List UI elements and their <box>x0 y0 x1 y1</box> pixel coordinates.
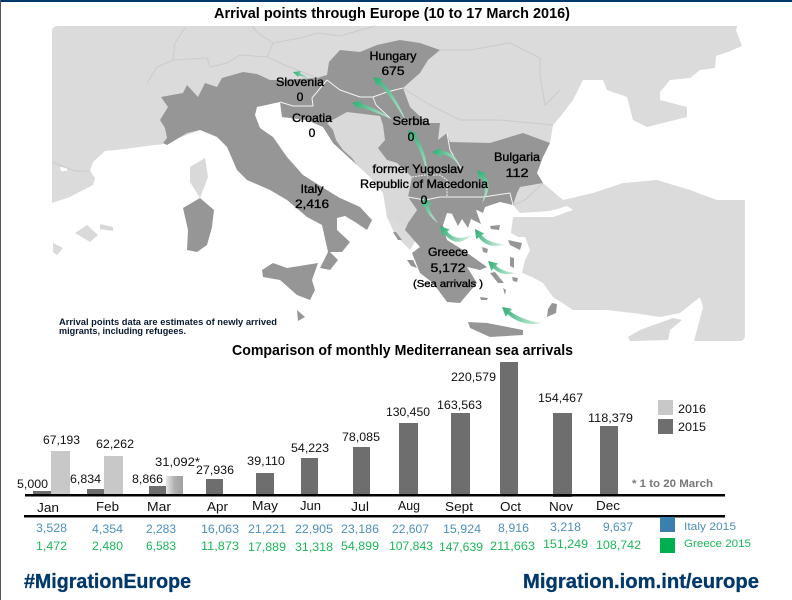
bar chart: monthly arrivals <box>17 362 725 518</box>
legend: 2016 and 2015: 2015 <box>678 420 706 434</box>
bar values: 27,936 <box>196 463 234 477</box>
land: Corsica <box>190 158 208 198</box>
data row: Greece 2015: 211,663 <box>490 541 535 553</box>
land: Balearic islands <box>53 224 113 255</box>
land: Sicily <box>262 263 318 300</box>
land: Bosnia, Montenegro and Albania <box>327 112 417 227</box>
data row: Greece 2015: 151,249 <box>543 539 588 551</box>
label: Bulgaria: Bulgaria <box>494 150 540 164</box>
data row: Italy 2015: 22,607 <box>392 524 429 536</box>
bar: April <box>206 479 223 495</box>
bar values <box>17 370 633 491</box>
title: arrival points: Arrival points through Europe (10 to 17 March 2016) <box>214 5 570 22</box>
legend: Greece 2015: Greece 2015 <box>684 538 751 550</box>
month labels: Feb <box>96 499 119 514</box>
legend: Italy 2015 <box>660 517 736 533</box>
bar values: 5,000 <box>17 477 48 491</box>
data row: Italy 2015: 16,063 <box>201 524 239 536</box>
data row: Italy 2015: 8,916 <box>498 523 529 535</box>
bar: October <box>500 362 518 495</box>
label: Hungary <box>370 49 416 78</box>
bar: June <box>301 458 318 495</box>
label: Slovenia: Slovenia <box>276 75 324 89</box>
bars: February <box>87 456 123 495</box>
bar values: 67,193 <box>43 433 80 447</box>
label: former Yugoslav Republic of Macedonia <box>360 162 488 207</box>
data row: Greece 2015: 107,843 <box>389 541 433 553</box>
land: Malta <box>297 310 305 321</box>
bar: May <box>256 473 274 496</box>
bar values: 118,379 <box>588 411 633 425</box>
data row: Italy 2015: 3,218 <box>550 522 581 534</box>
data row: Greece 2015: 31,318 <box>295 542 333 554</box>
data row: Italy 2015: 23,186 <box>341 524 379 536</box>
data row: Greece 2015: 17,889 <box>248 542 286 554</box>
bar values: 78,085 <box>342 430 380 444</box>
label: Serbia <box>392 114 430 144</box>
legend: 2016 and 2015: 2016 <box>678 402 706 416</box>
data row: Italy 2015: 9,637 <box>603 522 633 534</box>
month labels: Oct <box>500 499 521 514</box>
month labels: Jan <box>37 500 59 515</box>
arrow: to Serbia <box>408 130 428 180</box>
bar values: 31,092* <box>155 455 200 469</box>
legend: Greece 2015 <box>660 538 751 553</box>
label: Croatia <box>292 111 332 140</box>
data row: Greece 2015: 54,899 <box>341 541 379 553</box>
data row: Greece 2015: 108,742 <box>596 540 641 552</box>
month labels: May <box>252 498 279 513</box>
note: arrival points data: Arrival points data are estimates of newly arrived <box>59 317 277 327</box>
data row: Italy 2015: 4,354 <box>92 524 124 536</box>
label: Italy <box>295 182 329 211</box>
data row: Greece 2015: 2,480 <box>92 541 123 553</box>
footnote: 1 to 20 March: * 1 to 20 March <box>632 478 713 490</box>
month labels: Apr <box>207 499 229 514</box>
label: Italy: 2,416 <box>295 197 329 211</box>
data row: Greece 2015: 147,639 <box>439 542 483 554</box>
legend: 2016 and 2015 <box>658 400 706 434</box>
bar values: 220,579 <box>451 370 496 384</box>
hashtag: #MigrationEurope <box>24 571 191 593</box>
label: former Yugoslav Republic of Macedonia: former Yugoslav <box>372 162 464 176</box>
label: former Yugoslav Republic of Macedonia: Republic of Macedonia <box>360 177 488 191</box>
label: Greece <box>413 245 483 290</box>
bar: July <box>353 447 370 495</box>
month labels <box>37 498 621 515</box>
arrow: Bulgaria to Serbia <box>432 148 460 167</box>
data row: Italy 2015: 22,905 <box>295 524 333 536</box>
arrow: to Macedonia <box>422 197 438 223</box>
data row: Greece 2015: 11,873 <box>201 541 239 553</box>
label: Greece: (Sea arrivals ) <box>413 279 483 290</box>
bar values: 8,866 <box>132 472 163 486</box>
label: Bulgaria <box>494 150 540 180</box>
label: Croatia: Croatia <box>292 111 332 125</box>
label: Slovenia: 0 <box>297 90 304 104</box>
bar values: 130,450 <box>386 405 430 419</box>
land: Cyprus <box>628 318 682 341</box>
label: Hungary: 675 <box>382 64 405 78</box>
label: Serbia: Serbia <box>392 114 430 128</box>
month labels: Sept <box>445 499 473 514</box>
land: Balkan arrival countries <box>280 40 550 303</box>
bar: November <box>553 413 572 497</box>
data row: Italy 2015: 21,221 <box>248 524 286 536</box>
month labels: Jul <box>351 499 369 514</box>
label: Serbia: 0 <box>408 130 415 144</box>
land: Sardinia <box>183 198 214 252</box>
label: Slovenia <box>276 75 324 104</box>
data row: Italy 2015: 3,528 <box>36 523 67 535</box>
label: Hungary: Hungary <box>370 49 416 63</box>
bar values: 6,834 <box>70 472 101 486</box>
land: Italy <box>160 72 372 270</box>
month labels: Aug <box>398 498 420 513</box>
bar values: 39,110 <box>247 454 285 468</box>
data row: Greece 2015: 6,583 <box>146 541 176 553</box>
bars: January <box>33 451 70 495</box>
data row: Italy 2015: 2,283 <box>146 524 176 536</box>
arrow: sea route three <box>488 261 516 274</box>
label: former Yugoslav Republic of Macedonia: 0 <box>421 193 428 207</box>
note: arrival points data: migrants, including refugees. <box>59 326 186 336</box>
bar values: 62,262 <box>96 437 134 451</box>
bar values: 154,467 <box>538 391 583 405</box>
arrow: to Slovenia <box>293 71 310 80</box>
arrow: to Croatia <box>352 100 393 120</box>
bar values: 54,223 <box>291 441 329 455</box>
month labels: Jun <box>300 498 321 513</box>
arrows: migration routes <box>293 71 542 324</box>
label: Croatia: 0 <box>309 126 316 140</box>
land: Greek islands <box>393 210 557 337</box>
bar: August <box>399 423 418 495</box>
label: Greece: 5,172 <box>430 261 466 275</box>
data row: Italy 2015 <box>36 522 633 536</box>
bars: March <box>149 476 183 495</box>
data row: Italy 2015: 15,924 <box>443 524 482 536</box>
arrow: Greece to Bulgaria <box>477 170 489 203</box>
arrow: sea route two <box>475 229 505 246</box>
month labels: Mar <box>147 499 172 514</box>
bar values: 163,563 <box>437 398 482 412</box>
data row: Greece 2015: 1,472 <box>36 541 67 553</box>
label: Italy: Italy <box>300 182 324 196</box>
map of south-east Europe <box>50 24 748 345</box>
website: Migration.iom.int/europe <box>523 571 759 593</box>
label: Bulgaria: 112 <box>506 166 529 180</box>
legend: Italy 2015: Italy 2015 <box>684 521 736 533</box>
note: arrival points data <box>59 317 277 336</box>
arrow: sea route four <box>502 307 542 324</box>
bar: December <box>600 426 618 495</box>
month labels: Dec <box>596 498 621 513</box>
month labels: Nov <box>549 499 574 514</box>
label: Greece: Greece <box>428 245 468 259</box>
arrow: sea route one <box>440 226 472 242</box>
data row: Greece 2015 <box>36 539 641 554</box>
arrow: to Hungary <box>373 77 407 123</box>
bar: September <box>451 413 470 495</box>
title: monthly comparison: Comparison of monthly Mediterranean sea arrivals <box>232 342 573 359</box>
